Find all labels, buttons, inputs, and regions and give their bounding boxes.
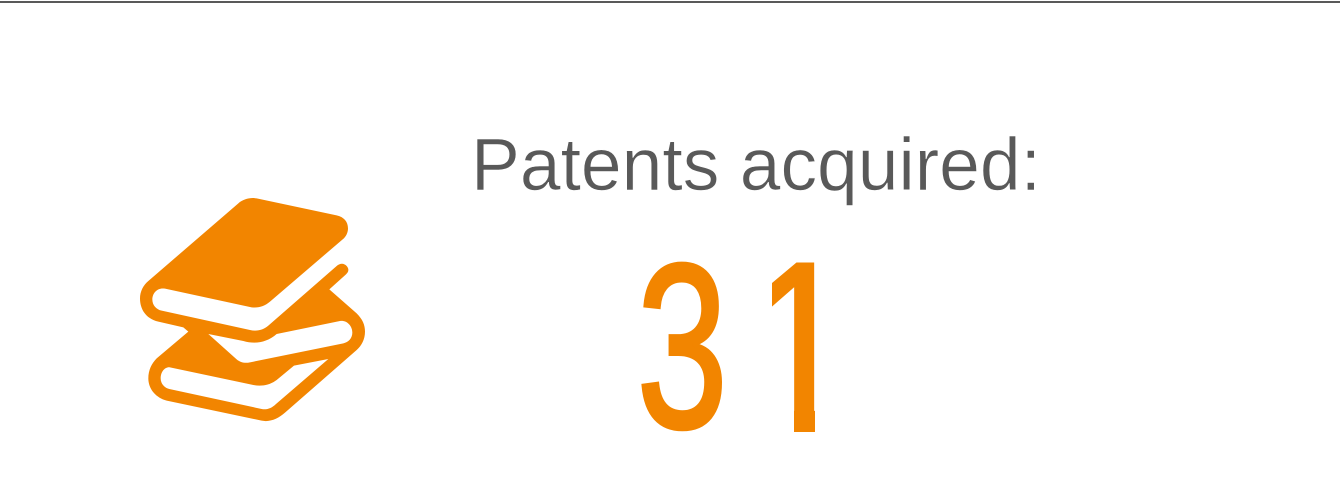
number: 31: 3 [637,215,728,477]
heading: Patents acquired: Patents acquired: [471,123,1041,206]
number: 31: 1 [746,212,856,482]
icon: stacked books [140,198,365,421]
number: 31 [637,212,870,482]
